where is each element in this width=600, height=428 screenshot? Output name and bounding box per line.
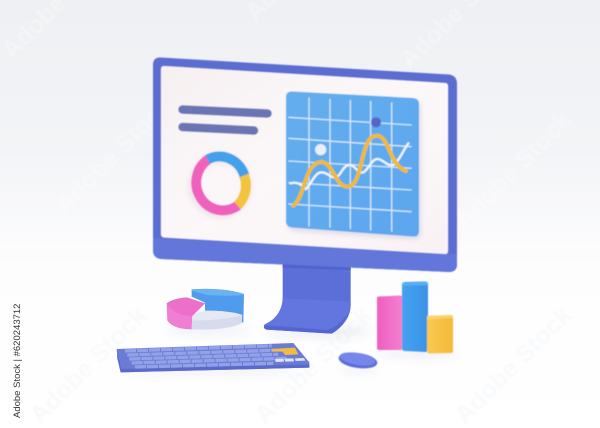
pink bar (377, 296, 402, 350)
white dot (315, 144, 326, 155)
watermark pattern: Adobe Stock (249, 301, 377, 428)
monitor screen (161, 66, 448, 254)
watermark pattern: Adobe Stock (49, 91, 177, 219)
monitor bezel (153, 57, 457, 272)
white slice (192, 311, 242, 330)
stock id caption: Adobe Stock | #620243712 (12, 304, 23, 418)
mouse (338, 350, 378, 371)
monitor stand (264, 263, 351, 334)
watermark pattern: Adobe Stock (194, 131, 322, 259)
watermark pattern: Adobe Stock (24, 301, 152, 428)
pink slice (167, 297, 205, 329)
white keys (275, 358, 305, 362)
purple dot (371, 117, 381, 127)
floor shadows (122, 327, 458, 374)
donut chart (193, 156, 247, 214)
watermark pattern: Adobe Stock (449, 106, 577, 234)
white line (291, 143, 408, 189)
chart grid (288, 98, 412, 232)
yellow line (293, 136, 406, 206)
keyboard (117, 343, 309, 372)
watermark pattern: Adobe Stock (449, 301, 577, 428)
blue bar (402, 282, 428, 352)
pie chart (167, 289, 244, 330)
monitor (153, 57, 457, 272)
keyboard keys (125, 346, 287, 367)
text placeholder bars (182, 110, 268, 130)
yellow bar (427, 315, 453, 354)
chart panel (286, 92, 421, 240)
blue slice (192, 289, 244, 323)
yellow key (271, 348, 298, 355)
bar chart (377, 282, 453, 354)
